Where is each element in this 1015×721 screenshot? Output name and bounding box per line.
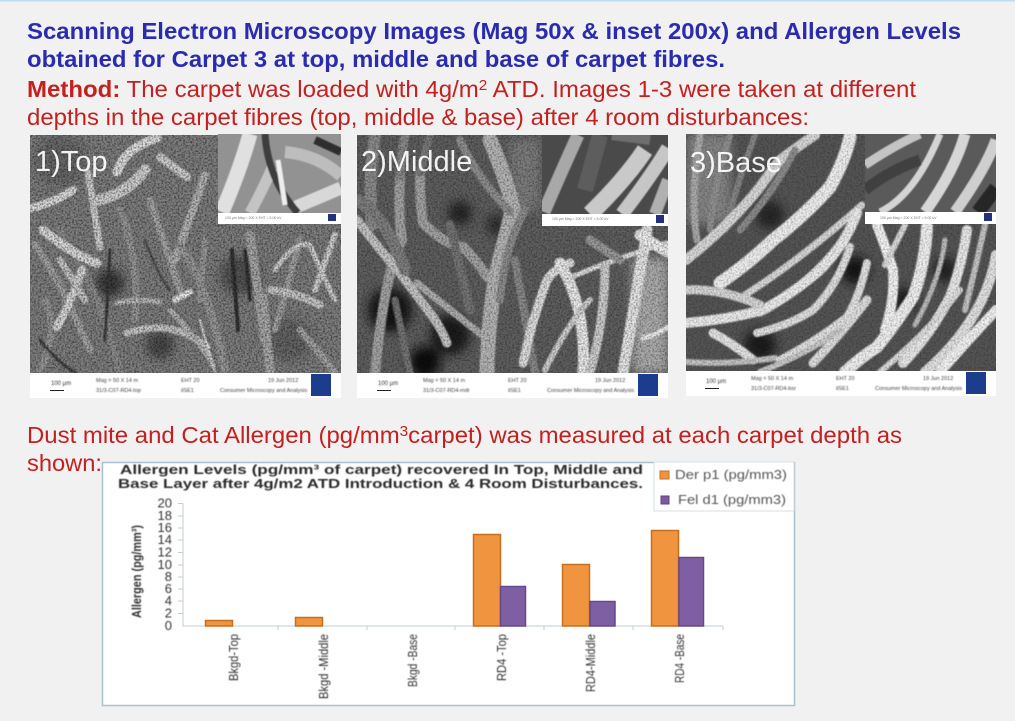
x axis labels: RD4 -Base [672,634,687,683]
label 3: 3)Base [690,147,782,179]
method text: 2 [479,77,487,94]
x axis labels: RD4 -Top [494,634,509,681]
y axis: 6 [165,581,172,596]
y axis: 20 [158,496,172,510]
inset 1 [218,134,341,224]
inset 3 [865,134,996,224]
y axis: 2 [165,606,172,620]
y axis: Allergen (pg/mm³) [130,525,144,618]
method text [27,76,916,130]
info band 2: Consumer Microscopy and Analysis [547,388,634,394]
x axis labels: Bkgd -Middle [316,634,331,699]
info band 1 [50,374,331,396]
title: Scanning Electron Microscopy Images (Mag 50x & inset 200x) and Allergen Levels [27,18,961,44]
info band 2: EHT 20 [508,378,527,384]
info band 3: Consumer Microscopy and Analysis [875,386,962,392]
info band 1: 31/3-C07-RD4-top [96,388,141,394]
y axis: 10 [158,557,172,572]
title [27,18,961,72]
SEM image 1: top [30,134,341,398]
info band 3 [705,372,986,394]
title: obtained for Carpet 3 at top, middle and base of carpet fibres. [27,46,725,72]
info band 2: ilSE1 [508,388,521,394]
allergen intro text: carpet) was measured at each carpet depth as [408,422,902,448]
info band 2 [377,374,658,396]
method text: Method: The carpet was loaded with 4g/m [27,76,471,102]
info band 1: Consumer Microscopy and Analysis [220,388,307,394]
inset 2: 100 µm Mag = 200 X EHT = 5.00 kV [552,217,609,221]
info band 2: 100 µm [378,381,398,387]
SEM image 3: base [686,134,996,396]
SEM image 2: middle [357,135,668,398]
info band 2: 31/3-C07-RD4-mdr [423,388,470,394]
info band 3: Mag = 50 X 14 m [751,376,793,382]
x axis labels: Bkgd-Top [226,634,241,681]
y axis: 0 [165,618,172,633]
inset 3: 100 µm Mag = 200 X EHT = 5.00 kV [880,216,937,220]
chart title: Allergen Levels (pg/mm³ of carpet) recovered In Top, Middle and [120,462,643,477]
inset 1: 100 µm Mag = 200 X EHT = 5.00 kV [225,216,282,220]
x axis labels [226,634,687,699]
y axis: 18 [158,508,172,523]
legend: Fel d1 (pg/mm3) [678,493,786,507]
info band 3: 31/3-C07-RD4-bsr [751,386,796,392]
info band 1: 19 Jun 2012 [268,378,298,384]
label 2: 2)Middle [361,146,472,178]
bars: Der p1 and Fel d1 [206,530,704,626]
allergen intro text: shown: [27,450,102,476]
info band 1: ilSE1 [181,388,194,394]
y axis: 8 [165,569,172,584]
legend [654,462,794,511]
info band 3: 19 Jun 2012 [923,376,953,382]
info band 3: 100 µm [706,379,726,385]
legend: Der p1 (pg/mm3) [675,468,787,482]
x axis labels: Bkgd -Base [405,634,420,687]
info band 2: 19 Jun 2012 [595,378,625,384]
y axis: 12 [158,544,172,560]
info band 1: EHT 20 [181,378,200,384]
method text: ATD. Images 1-3 were taken at different [487,76,916,102]
y axis: 16 [158,520,172,535]
y axis [130,496,723,633]
info band 2: Mag = 50 X 14 m [423,378,465,384]
chart panel [102,462,794,706]
allergen intro text: Dust mite and Cat Allergen (pg/mm [27,422,393,448]
info band 3: ilSE1 [836,386,849,392]
inset 2 [542,135,668,226]
x axis labels: RD4-Middle [583,634,598,692]
method text: depths in the carpet fibres (top, middle & base) after 4 room disturbances: [27,104,809,130]
y axis: 14 [158,532,172,547]
label 1: 1)Top [35,146,108,178]
info band 1: 100 µm [51,381,71,387]
info band 3: EHT 20 [836,376,855,382]
chart title: Base Layer after 4g/m2 ATD Introduction & 4 Room Disturbances. [118,476,643,491]
info band 1: Mag = 50 X 14 m [96,378,138,384]
allergen intro text [27,422,902,476]
chart title [118,462,643,491]
y axis: 4 [165,593,172,608]
allergen intro text: 3 [400,423,408,440]
